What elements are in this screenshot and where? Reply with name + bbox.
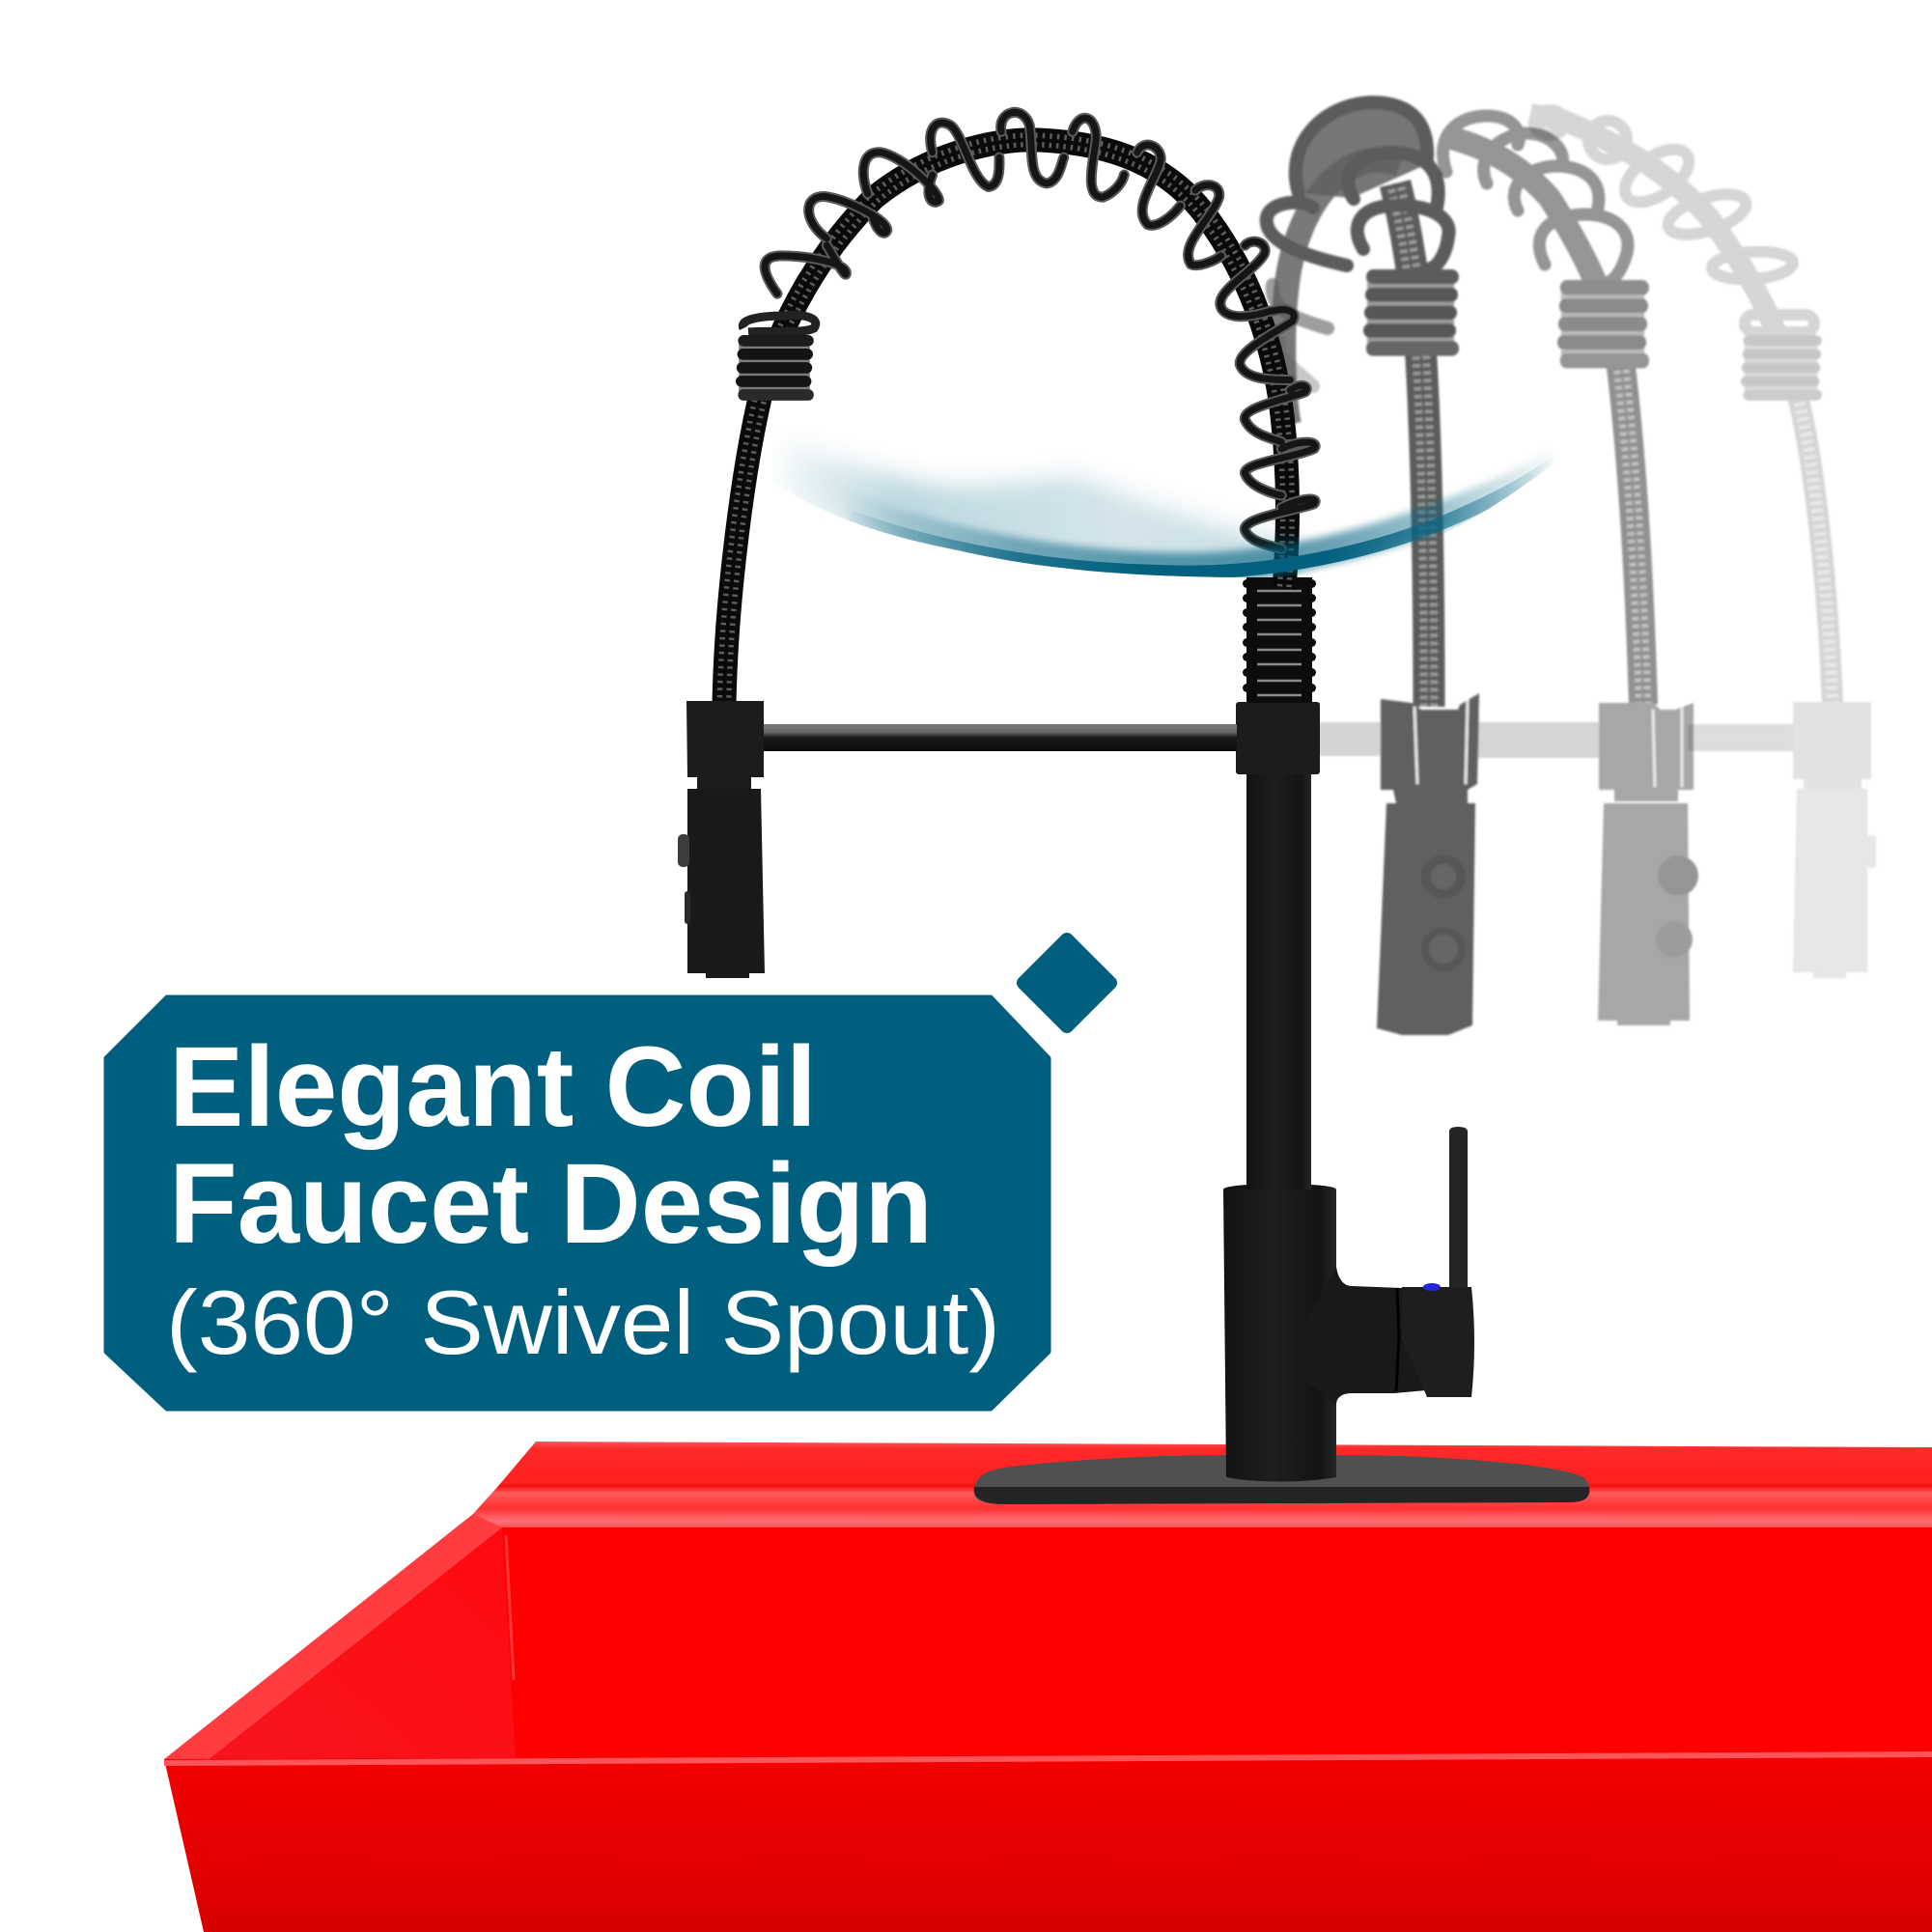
sink basin: [164, 1442, 1932, 1932]
blue indicator dot: [1423, 1283, 1441, 1291]
ghost faucet: faintest swivel position: [1530, 110, 1876, 978]
handle body: [1299, 1267, 1426, 1405]
sink inner wall: [204, 1527, 1932, 1763]
spring coils: [765, 112, 1315, 548]
swivel motion swoosh: [784, 442, 1556, 580]
upper column: [1246, 772, 1311, 1190]
handle cap: [1402, 1287, 1474, 1397]
spring sleeve: [1243, 577, 1316, 703]
tight coil: [736, 335, 814, 401]
ghost arm: [1313, 722, 1390, 756]
wand button upper: [678, 834, 689, 867]
cross arm: [762, 724, 1237, 751]
ghost faucet: middle swivel position: [1442, 116, 1698, 1025]
ghost coil blob: [1297, 102, 1427, 198]
spray hose: [724, 140, 1288, 705]
ghost hose: [1530, 114, 1833, 705]
lever: [1449, 1127, 1468, 1287]
ghost rear hose: [1283, 160, 1400, 425]
ghost tight coil: [1557, 280, 1649, 368]
main faucet: [678, 112, 1589, 1504]
ghost wand: [1598, 803, 1690, 1025]
ghost coil rings: [1534, 110, 1814, 332]
ghost tight coil: [1741, 335, 1822, 401]
faucet base column: [1223, 1184, 1336, 1481]
wand button lower: [685, 891, 690, 924]
ghost buttons: [1658, 855, 1698, 896]
sink left inner wall: [204, 1527, 516, 1763]
ghost coil rings: [1267, 102, 1449, 386]
ghost hose: [1395, 183, 1429, 707]
deck plate: [974, 1455, 1589, 1504]
sink front rim: [164, 1754, 1932, 1763]
ghost tight coil: [1363, 269, 1459, 356]
callout background: [106, 997, 1049, 1409]
ghost wand: [1793, 789, 1867, 978]
ghost holder: [1381, 693, 1479, 803]
ghost buttons: [1867, 835, 1876, 868]
accent diamond: [1023, 939, 1110, 1026]
handle seam: [1396, 1288, 1399, 1391]
ghost hose: [1448, 137, 1643, 705]
ghost buttons: [1421, 854, 1466, 899]
sink front face: [164, 1751, 1932, 1932]
headline line 1: Elegant Coil: [169, 1023, 817, 1151]
ghost arm: [1477, 722, 1601, 758]
ghost arm: [1688, 724, 1797, 751]
ghost holder slits: [1414, 700, 1468, 784]
ghost wand: [1377, 803, 1475, 1035]
ghost holder slits: [1653, 707, 1682, 787]
sink left rim: [164, 1514, 502, 1763]
collar: [1236, 702, 1320, 774]
spray wand: [687, 789, 765, 978]
sink back deck: [473, 1442, 1932, 1530]
ghost holder: [1599, 703, 1694, 801]
headline line 2: Faucet Design: [169, 1140, 933, 1268]
ghost faucet: near swivel position: [1267, 102, 1479, 1035]
top loop of tight coil: [742, 316, 816, 332]
callout panel: [106, 997, 1049, 1409]
ghost holder: [1793, 702, 1871, 789]
subheading: (360° Swivel Spout): [166, 1272, 1000, 1373]
spray head holder: [686, 701, 764, 789]
ghost coil rings: [1442, 116, 1628, 282]
sink inner corner highlight: [506, 1535, 514, 1680]
